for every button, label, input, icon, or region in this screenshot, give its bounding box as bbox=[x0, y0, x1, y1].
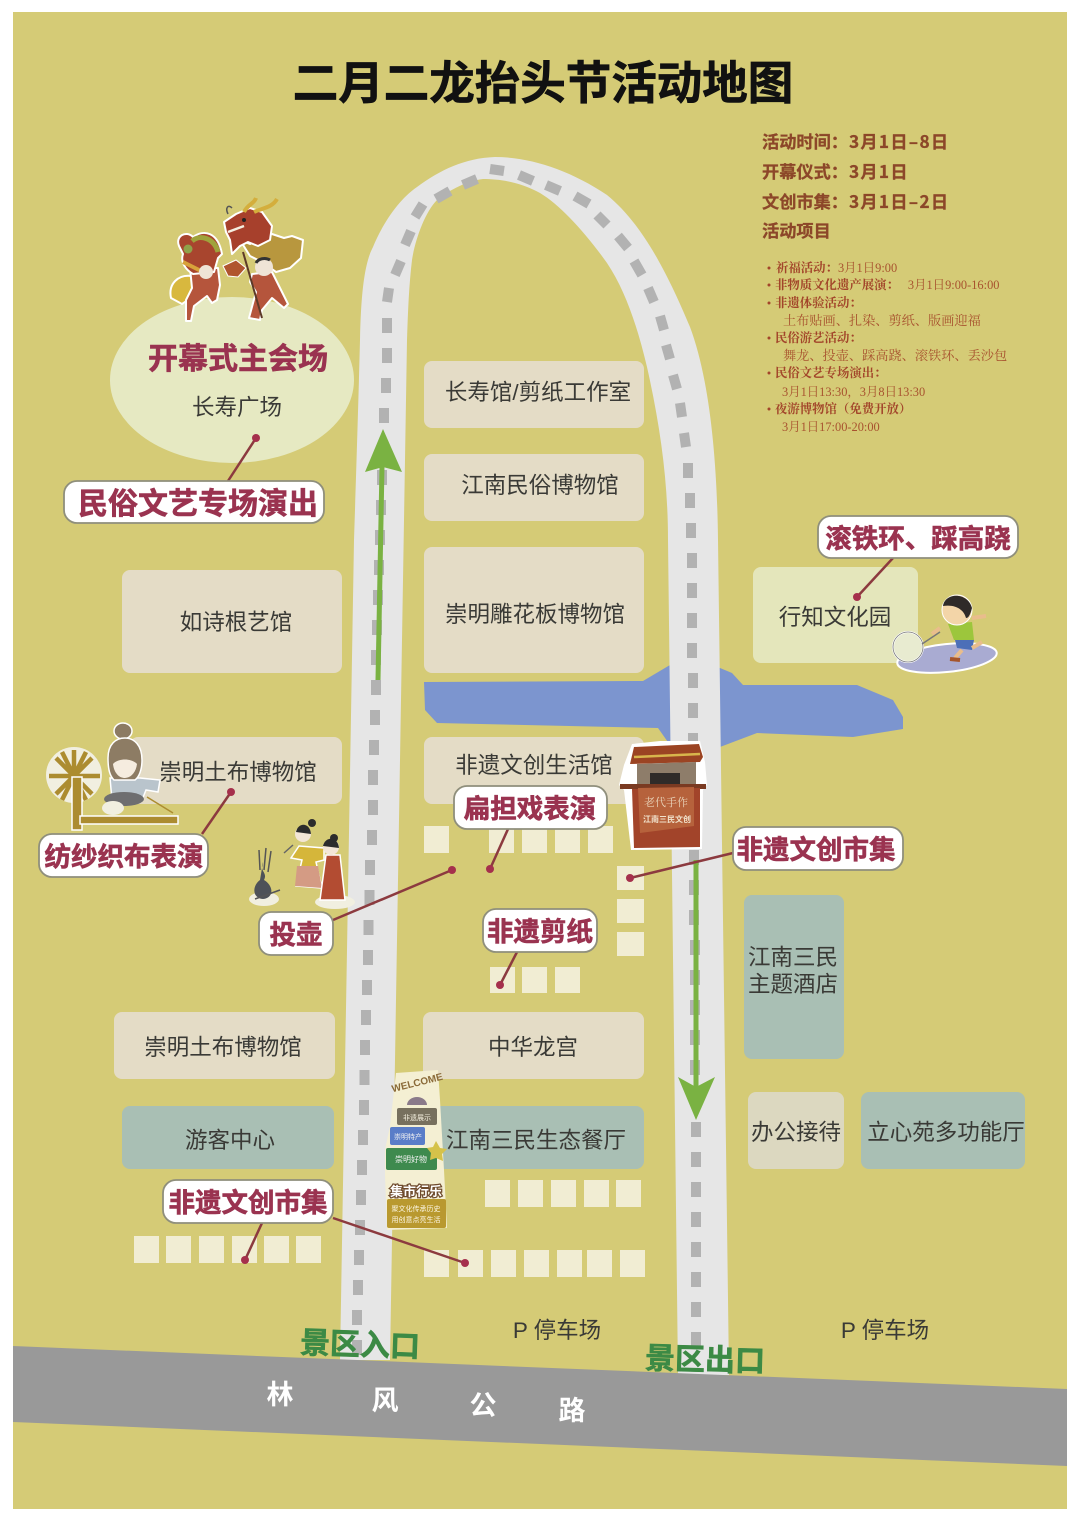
building: 崇明土布博物馆 upper bbox=[130, 737, 342, 804]
info block: activity list: 非遗体验活动： bbox=[775, 295, 862, 310]
info block: activity list: 祈福活动：3月1日9:00 bbox=[776, 260, 897, 275]
callout: 非遗文创市集 right: 非遗文创市集 bbox=[736, 835, 896, 865]
main road 林风公路: 路 bbox=[558, 1396, 586, 1426]
building: 中华龙宫 bbox=[423, 1012, 644, 1079]
opening ceremony venue ellipse bbox=[110, 297, 354, 463]
building: 非遗文创生活馆 bbox=[424, 737, 644, 804]
exit label: 景区出口 bbox=[645, 1342, 765, 1379]
lion dancer bbox=[170, 233, 222, 321]
info block: activity list: 土布贴画、扎染、剪纸、版画迎福 bbox=[783, 312, 981, 328]
building: 立心苑多功能厅: 立心苑多功能厅 bbox=[867, 1120, 1025, 1145]
title: 二月二龙抬头节活动地图 bbox=[293, 58, 793, 109]
arrow: downward exit direction bbox=[678, 860, 715, 1120]
stall squares left row bbox=[134, 1236, 321, 1263]
info block: activity list: 民俗游艺活动： bbox=[775, 330, 862, 345]
building: 崇明土布博物馆 upper: 崇明土布博物馆 bbox=[159, 760, 317, 785]
callout: 非遗剪纸: 非遗剪纸 bbox=[487, 917, 593, 947]
icon: handicraft market stall: 江南三民文创 bbox=[643, 814, 691, 824]
info block: activity list: 舞龙、投壶、踩高跷、滚铁环、丢沙包 bbox=[783, 347, 1007, 363]
building: 江南三民主题酒店: 江南三民 bbox=[748, 945, 838, 970]
callout: 纺纱织布表演: 纺纱织布表演 bbox=[44, 842, 204, 872]
icon: market poster stack bbox=[385, 1070, 447, 1230]
callout: 非遗剪纸 bbox=[483, 909, 597, 989]
building: 江南民俗博物馆 bbox=[424, 454, 644, 521]
icon: touhu game figures bbox=[249, 819, 355, 909]
icon: market poster stack: 非遗展示 bbox=[403, 1113, 431, 1122]
building: 行知文化园: 行知文化园 bbox=[779, 605, 891, 630]
info block: dates: 活动时间：3月1日–8日 bbox=[762, 128, 949, 153]
main road 林风公路: 公 bbox=[470, 1391, 496, 1421]
info block: dates bbox=[762, 128, 949, 242]
callout: 纺纱织布表演 bbox=[39, 788, 235, 877]
building: 江南民俗博物馆: 江南民俗博物馆 bbox=[461, 473, 619, 498]
icon: spinning wheel girl bbox=[46, 723, 178, 830]
info block: activity list: 夜游博物馆（免费开放） bbox=[775, 401, 911, 416]
building: 立心苑多功能厅 bbox=[861, 1092, 1025, 1169]
building: 游客中心 bbox=[122, 1106, 334, 1169]
building: 崇明土布博物馆 lower bbox=[114, 1012, 335, 1079]
icon: market poster stack: 崇明好物 bbox=[395, 1154, 427, 1164]
building: 长寿馆/剪纸工作室: 长寿馆/剪纸工作室 bbox=[445, 380, 631, 405]
icon: handicraft market stall: 老代手作 bbox=[644, 795, 688, 809]
stall squares restaurant row bbox=[485, 1180, 641, 1207]
building: 崇明雕花板博物馆: 崇明雕花板博物馆 bbox=[445, 602, 625, 627]
parking label right: P 停车场 bbox=[841, 1318, 929, 1343]
info block: activity list: 非物质文化遗产展演： 3月1日9:00-16:00 bbox=[775, 277, 999, 292]
callout: 扁担戏表演 bbox=[454, 786, 607, 873]
building: 崇明土布博物馆 lower: 崇明土布博物馆 bbox=[144, 1035, 302, 1060]
building: 游客中心: 游客中心 bbox=[185, 1128, 275, 1153]
building: 长寿馆/剪纸工作室 bbox=[424, 361, 644, 428]
info block: activity list: 民俗文艺专场演出： bbox=[775, 365, 887, 380]
icon: market poster stack: 集市行乐 bbox=[390, 1184, 442, 1199]
winding visitor road bbox=[340, 157, 729, 1375]
callout: 民俗文艺专场演出: 民俗文艺专场演出 bbox=[78, 488, 318, 521]
main road 林风公路: 风 bbox=[372, 1386, 398, 1416]
callout: 滚铁环、踩高跷 bbox=[818, 516, 1018, 601]
info block: activity list: 3月1日13:30，3月8日13:30 bbox=[782, 385, 925, 399]
river bbox=[424, 665, 903, 747]
stall squares row under 扁担戏 bbox=[424, 826, 613, 853]
info block: activity list: 3月1日17:00-20:00 bbox=[782, 420, 880, 434]
callout: 非遗文创市集 left: 非遗文创市集 bbox=[168, 1188, 328, 1218]
opening ceremony venue ellipse: 长寿广场 bbox=[192, 395, 282, 420]
info block: dates: 活动项目 bbox=[762, 217, 831, 242]
callout: 投壶 bbox=[259, 866, 456, 955]
stall squares column bbox=[617, 866, 644, 956]
callout: 非遗文创市集 left bbox=[163, 1180, 469, 1267]
main road 林风公路 bbox=[13, 1346, 1067, 1466]
stall squares bottom row bbox=[424, 1250, 645, 1277]
icon: boy rolling iron hoop bbox=[893, 595, 998, 677]
callout: 扁担戏表演: 扁担戏表演 bbox=[464, 794, 596, 824]
icon: market poster stack: WELCOME bbox=[391, 1072, 444, 1095]
building: 江南三民生态餐厅: 江南三民生态餐厅 bbox=[446, 1128, 626, 1153]
building: 非遗文创生活馆: 非遗文创生活馆 bbox=[455, 753, 613, 778]
icon: market poster stack: 崇明特产 bbox=[394, 1132, 422, 1141]
icon: market poster stack: 聚文化传承历史 bbox=[392, 1204, 440, 1213]
callout: 滚铁环、踩高跷: 滚铁环、踩高跷 bbox=[825, 524, 1011, 554]
info block: activity list bbox=[768, 260, 1007, 434]
building: 江南三民主题酒店: 主题酒店 bbox=[748, 972, 838, 997]
building: 如诗根艺馆: 如诗根艺馆 bbox=[180, 610, 292, 635]
icon: handicraft market stall bbox=[619, 741, 707, 850]
main road 林风公路: 林 bbox=[266, 1380, 294, 1410]
building: 办公接待: 办公接待 bbox=[751, 1120, 841, 1145]
info block: dates: 文创市集：3月1日–2日 bbox=[762, 188, 949, 213]
info block: dates: 开幕仪式：3月1日 bbox=[762, 158, 909, 183]
arrow: upward entry direction bbox=[365, 429, 402, 680]
stall squares paper cutting bbox=[490, 967, 580, 993]
callout: 非遗文创市集 right bbox=[626, 827, 903, 882]
dragon dancer bbox=[224, 208, 303, 272]
building: 江南三民主题酒店 bbox=[744, 895, 844, 1059]
callout: 投壶: 投壶 bbox=[270, 920, 322, 950]
building: 崇明雕花板博物馆 bbox=[424, 547, 644, 673]
entrance label: 景区入口 bbox=[299, 1327, 421, 1364]
icon: market poster stack: 用创意点亮生活 bbox=[392, 1215, 440, 1224]
callout: 民俗文艺专场演出 bbox=[64, 434, 324, 523]
icon: lion and dragon dancers bbox=[170, 198, 303, 321]
parking label left: P 停车场 bbox=[513, 1318, 601, 1343]
building: 中华龙宫: 中华龙宫 bbox=[488, 1035, 578, 1060]
building: 江南三民生态餐厅 bbox=[430, 1106, 644, 1169]
building: 如诗根艺馆 bbox=[122, 570, 342, 673]
building: 办公接待 bbox=[748, 1092, 844, 1169]
building: 行知文化园 bbox=[753, 567, 918, 663]
opening ceremony venue ellipse: 开幕式主会场 bbox=[148, 343, 328, 376]
